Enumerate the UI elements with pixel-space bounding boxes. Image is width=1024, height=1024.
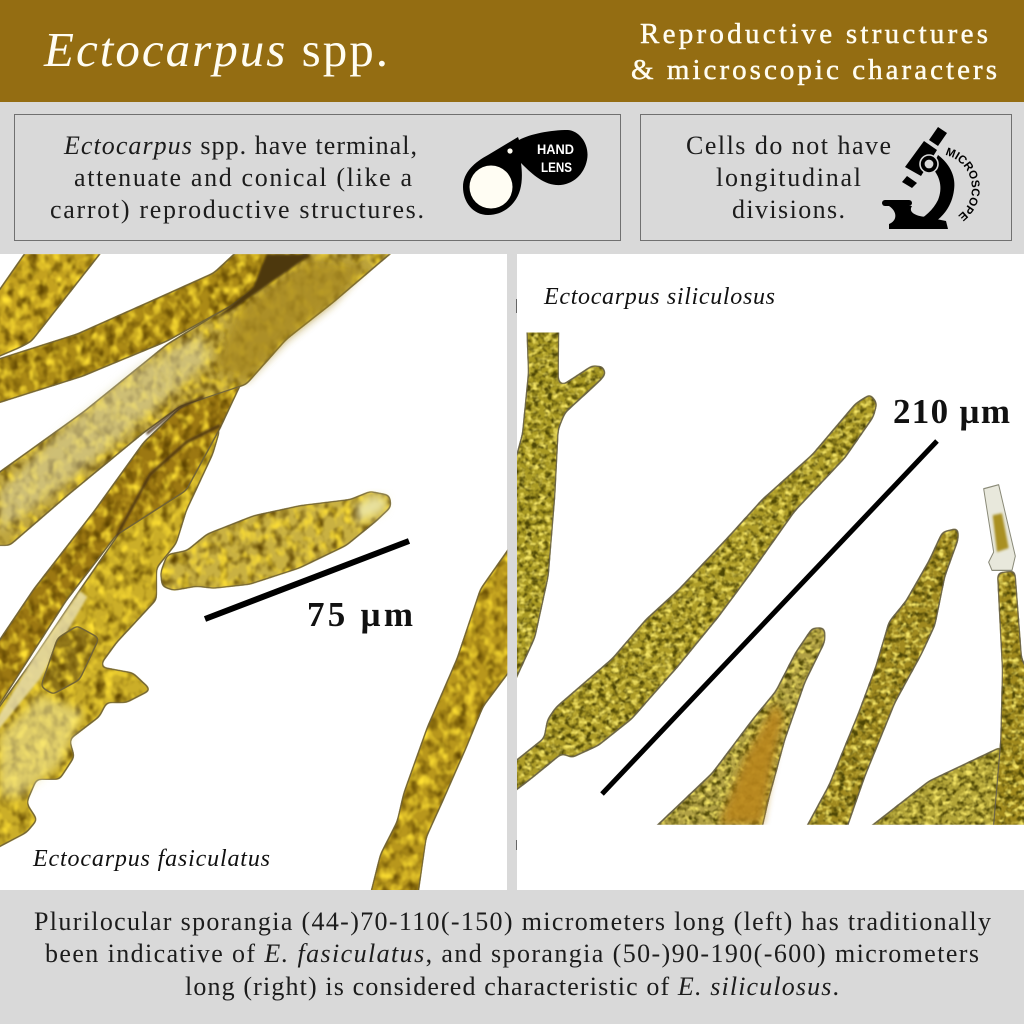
icon: microscope	[882, 127, 980, 229]
panel: hand lens observation	[14, 114, 620, 240]
icon: hand lens	[463, 130, 588, 215]
header subtitle	[631, 18, 997, 86]
species label: Ectocarpus fasiculatus: Ectocarpus fasiculatus	[32, 846, 270, 872]
hand lens text	[50, 131, 424, 224]
hand lens text: attenuate and conical (like a	[74, 163, 412, 192]
micrograph: Ectocarpus siliculosus filaments	[517, 332, 1024, 825]
microscope text: longitudinal	[716, 163, 861, 192]
microscope text	[686, 131, 891, 224]
species label: Ectocarpus siliculosus: Ectocarpus siliculosus	[543, 284, 775, 310]
icon: hand lens: HAND	[537, 142, 574, 157]
panel: left micrograph	[0, 238, 520, 907]
title: Ectocarpus spp.	[43, 22, 388, 77]
hand lens text: carrot) reproductive structures.	[50, 195, 424, 224]
microscope text: Cells do not have	[686, 131, 891, 160]
scale label: 210 µm: 210 µm	[893, 392, 1010, 431]
scale bar: 75 micrometers	[205, 541, 409, 619]
header subtitle: & microscopic characters	[631, 54, 997, 86]
panel: right micrograph	[505, 254, 1024, 890]
micrograph: Ectocarpus fasiculatus filaments	[0, 238, 520, 907]
scale bar: 210 micrometers	[602, 441, 937, 794]
icon: hand lens: LENS	[541, 160, 572, 175]
header subtitle: Reproductive structures	[640, 18, 988, 50]
caption band: long (right) is considered characteristic of E. siliculosus.	[185, 972, 839, 1001]
panel: microscope observation	[640, 114, 1012, 241]
microscope text: divisions.	[732, 195, 845, 224]
icon: microscope: MICROSCOPE	[946, 148, 980, 222]
caption band: Plurilocular sporangia (44-)70-110(-150) micrometers long (left) has traditionally	[34, 907, 991, 936]
scale label: 75 µm: 75 µm	[307, 595, 413, 634]
header banner	[0, 0, 1024, 102]
caption band: been indicative of E. fasiculatus, and sporangia (50-)90-190(-600) micrometers	[45, 939, 979, 968]
caption band	[0, 891, 1024, 1024]
hand lens text: Ectocarpus spp. have terminal,	[63, 131, 417, 160]
